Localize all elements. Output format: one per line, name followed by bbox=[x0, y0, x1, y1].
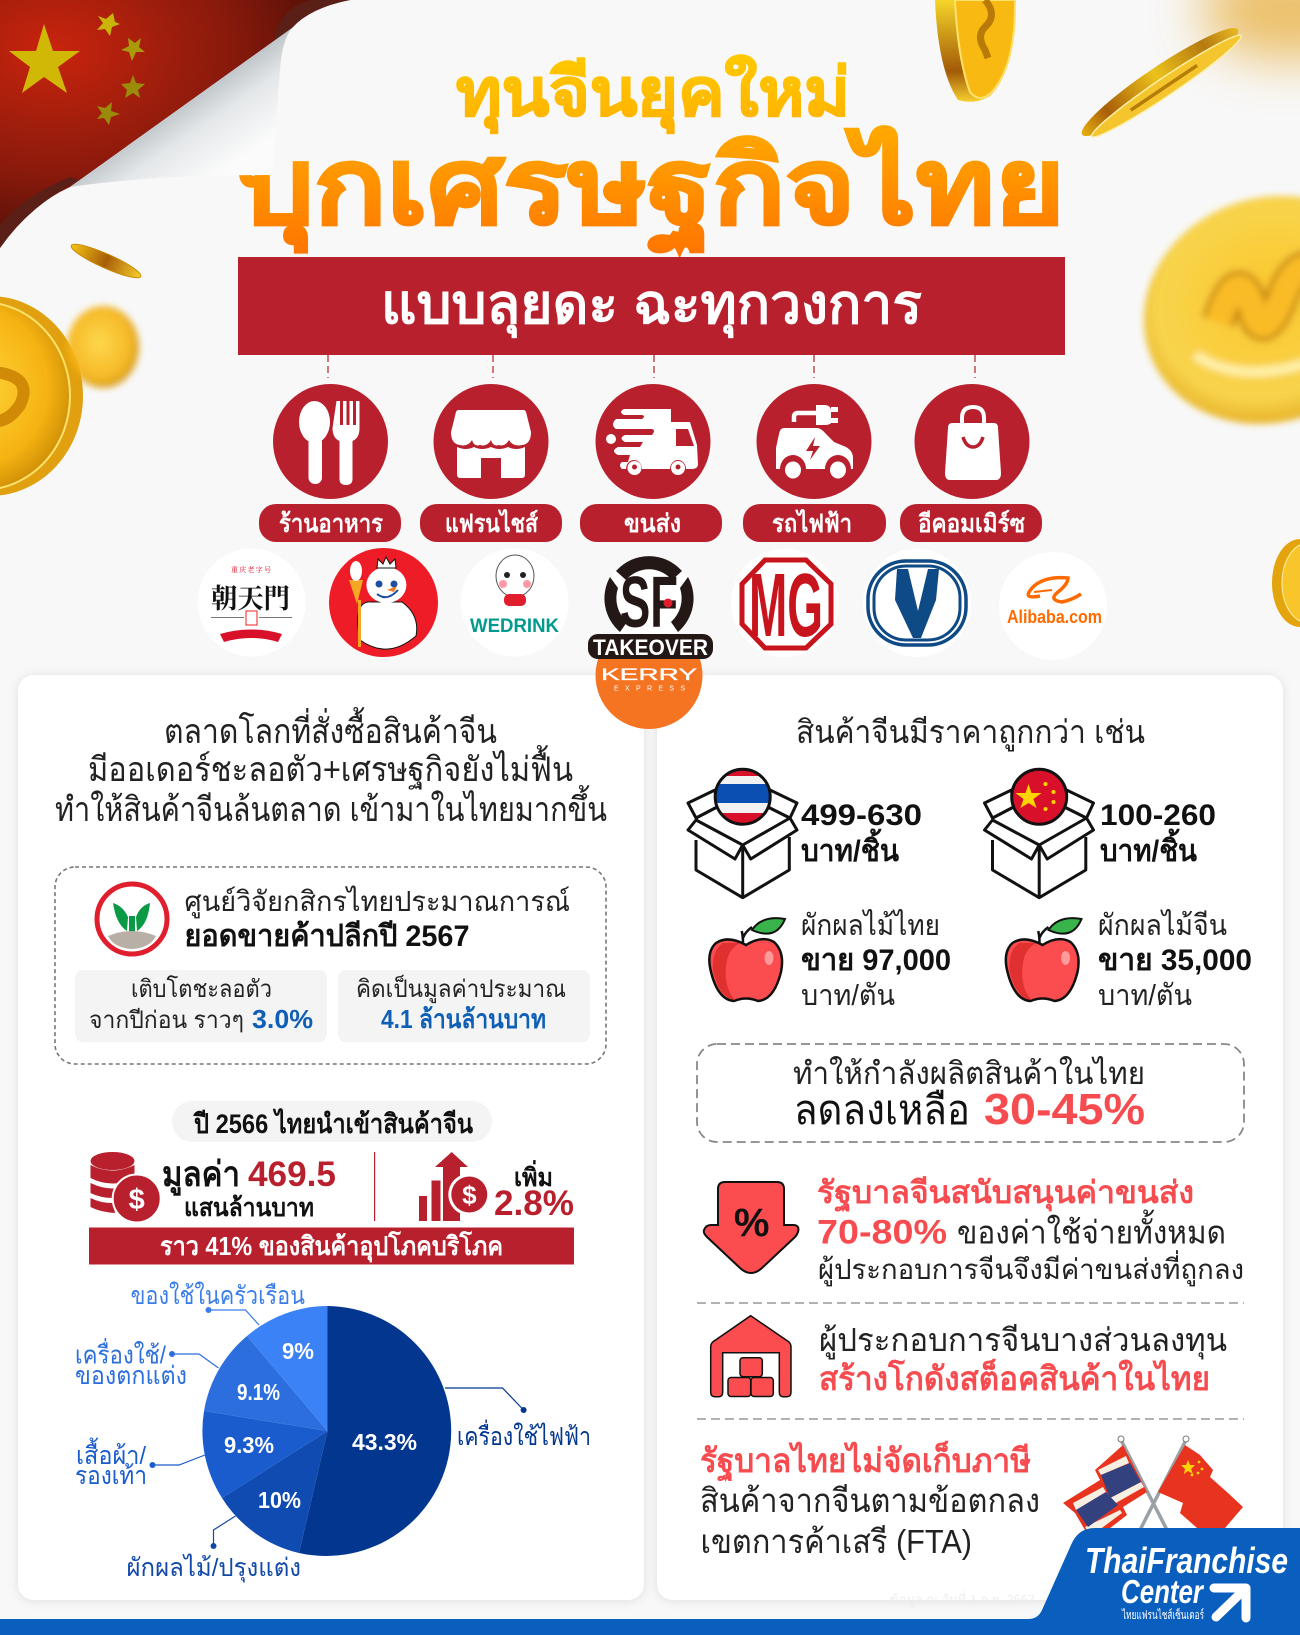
slice 9.1% bbox=[204, 1336, 328, 1431]
category: EV bbox=[743, 384, 886, 542]
footer brand: ThaiFranchise Center: ไทยแฟรนไชส์เซ็นเตอร์ bbox=[1121, 1607, 1204, 1622]
kerry circle bbox=[596, 659, 702, 729]
pie label: electronics: เครื่องใช้ไฟฟ้า bbox=[457, 1419, 591, 1451]
logo: Chao Tian Men: 重庆老字号 bbox=[231, 565, 271, 575]
label: logistics: ขนส่ง bbox=[624, 510, 681, 538]
text: shipping subsidy: ผู้ประกอบการจีนจึงมีค่าขนส่งที่ถูกลง bbox=[818, 1250, 1244, 1287]
flag corner with page curl bbox=[0, 0, 350, 248]
forecast heading: ศูนย์วิจัยกสิกรไทยประมาณการณ์ bbox=[184, 886, 570, 919]
text: warehouse: ผู้ประกอบการจีนบางส่วนลงทุน bbox=[819, 1322, 1227, 1360]
pie label: food: ผักผลไม้/ปรุงแต่ง bbox=[126, 1553, 301, 1583]
coin: right big blurred bbox=[1111, 161, 1300, 459]
text: FTA bbox=[700, 1440, 1040, 1560]
coin: left blurred small bbox=[67, 306, 139, 388]
logo: SF takeover Kerry: SF bbox=[620, 563, 678, 643]
stat: growth: จากปีก่อน ราวๆ bbox=[89, 1007, 244, 1034]
pie label: decor: เครื่องใช้/ bbox=[75, 1338, 166, 1370]
icon: kasikorn logo bbox=[97, 884, 167, 954]
category: restaurant bbox=[259, 384, 401, 542]
kerry circle: KERRY bbox=[601, 665, 697, 684]
text: shipping subsidy: 70-80% bbox=[817, 1214, 947, 1252]
logo: MG bbox=[731, 549, 839, 657]
label: EV bbox=[743, 504, 886, 542]
label: franchise: แฟรนไชส์ bbox=[445, 508, 539, 538]
icon: down arrow percent bbox=[704, 1182, 798, 1273]
text: FTA: สินค้าจากจีนตามข้อตกลง bbox=[700, 1482, 1040, 1519]
icon: growth bars with arrow bbox=[419, 1152, 490, 1221]
pie label: food bbox=[126, 1516, 301, 1583]
category: logistics bbox=[580, 384, 722, 542]
logo: Mixue bbox=[329, 548, 438, 657]
stat: value: คิดเป็นมูลค่าประมาณ bbox=[356, 974, 566, 1004]
left panel heading: มีออเดอร์ชะลอตัว+เศรษฐกิจยังไม่ฟื้น bbox=[88, 745, 573, 790]
left panel heading bbox=[55, 707, 607, 829]
callout: capacity: ทำให้กำลังผลิตสินค้าในไทย bbox=[793, 1056, 1145, 1091]
import growth bbox=[494, 1160, 574, 1223]
text: warehouse bbox=[819, 1322, 1227, 1397]
coin: top-right edge-on bbox=[1074, 17, 1247, 148]
produce price: China: บาท/ตัน bbox=[1098, 980, 1192, 1012]
icon: coin stack: $ bbox=[129, 1184, 145, 1216]
import heading pill: ปี 2566 ไทยนำเข้าสินค้าจีน bbox=[193, 1108, 473, 1139]
panel: left bbox=[18, 675, 644, 1600]
produce price: China: ผักผลไม้จีน bbox=[1098, 908, 1227, 942]
produce price: Thai bbox=[801, 908, 951, 1012]
logo: SF takeover Kerry: TAKEOVER bbox=[593, 635, 708, 660]
label: restaurant: ร้านอาหาร bbox=[279, 510, 383, 538]
callout: capacity: ลดลงเหลือ bbox=[794, 1087, 970, 1133]
category: e-commerce bbox=[900, 384, 1042, 542]
price: Chinese goods: 100-260 bbox=[1100, 799, 1216, 832]
logo: Chao Tian Men: 朝天門 bbox=[211, 577, 290, 616]
icon: apple Thai bbox=[709, 918, 785, 1001]
icon: box with China flag bbox=[984, 769, 1094, 898]
pie label: electronics bbox=[445, 1388, 591, 1451]
pie label: household bbox=[131, 1281, 305, 1325]
title bbox=[238, 53, 1065, 256]
produce price: Thai: ผักผลไม้ไทย bbox=[801, 908, 940, 942]
pie label: decor bbox=[75, 1338, 218, 1390]
text: FTA: รัฐบาลไทยไม่จัดเก็บภาษี bbox=[700, 1440, 1031, 1482]
title line 2: บุกเศรษฐกิจไทย bbox=[238, 126, 1065, 256]
logo: Wedrink bbox=[460, 548, 568, 656]
logo: Wedrink: WEDRINK bbox=[470, 616, 559, 637]
kerry circle: EXPRESS bbox=[614, 686, 685, 692]
flag stars bbox=[9, 13, 145, 125]
slice 9% bbox=[247, 1306, 328, 1431]
produce price: China: ขาย 35,000 bbox=[1098, 944, 1252, 977]
icon: brand arrow bbox=[1214, 1588, 1246, 1618]
pie label: decor: ของตกแต่ง bbox=[75, 1362, 187, 1390]
price: Chinese goods bbox=[1100, 799, 1216, 868]
icon: delivery truck bbox=[606, 409, 698, 475]
pie label: apparel bbox=[75, 1437, 205, 1490]
stat: value: 4.1 ล้านล้านบาท bbox=[381, 1004, 546, 1034]
icon: down arrow percent: % bbox=[734, 1201, 769, 1245]
pie label: apparel: เสื้อผ้า/ bbox=[76, 1437, 146, 1470]
right panel heading: สินค้าจีนมีราคาถูกกว่า เช่น bbox=[796, 714, 1145, 752]
icon: shopping bag bbox=[945, 407, 1001, 480]
stat: value bbox=[338, 970, 590, 1042]
import value: 469.5 bbox=[248, 1155, 336, 1194]
logo: Chao Tian Men bbox=[198, 548, 306, 656]
left panel heading: ตลาดโลกที่สั่งซื้อสินค้าจีน bbox=[164, 707, 497, 751]
stat: growth bbox=[75, 970, 327, 1042]
Thai flag bbox=[1063, 1445, 1147, 1542]
produce price: China bbox=[1098, 908, 1252, 1012]
retail forecast box: ยอดขายค้าปลีกปี 2567 bbox=[184, 920, 470, 953]
import value: มูลค่า bbox=[162, 1155, 240, 1196]
pie chart: 9.1% bbox=[237, 1379, 280, 1405]
pie chart: 43.3% bbox=[352, 1429, 417, 1455]
text: ข้อมูล ณ วันที่ 1 ก.ย. 2567 bbox=[890, 1591, 1035, 1608]
pie label: household: ของใช้ในครัวเรือน bbox=[131, 1281, 305, 1310]
label: EV: รถไฟฟ้า bbox=[772, 508, 852, 538]
produce price: Thai: ขาย 97,000 bbox=[801, 944, 951, 977]
text: shipping subsidy bbox=[817, 1175, 1244, 1287]
logo: MG: MG bbox=[749, 555, 823, 656]
icon: coin stack bbox=[90, 1152, 161, 1222]
panel: right bbox=[657, 675, 1283, 1600]
icon: electric car bbox=[776, 405, 853, 478]
title line 1: ทุนจีนยุคใหม่ bbox=[456, 53, 850, 134]
label: logistics bbox=[580, 504, 722, 542]
import heading pill bbox=[172, 1101, 492, 1142]
price: Thai goods bbox=[801, 799, 922, 868]
callout: capacity bbox=[697, 1044, 1244, 1142]
icon: crossed flags bbox=[1063, 1436, 1243, 1542]
import value: แสนล้านบาท bbox=[184, 1194, 314, 1222]
import growth: 2.8% bbox=[494, 1184, 574, 1223]
consumer goods band: ราว 41% ของสินค้าอุปโภคบริโภค bbox=[160, 1230, 503, 1263]
slice 9.3% bbox=[202, 1411, 328, 1498]
price: Chinese goods: บาท/ชิ้น bbox=[1100, 828, 1197, 868]
slice 43.3% bbox=[299, 1306, 451, 1556]
icon: box with Thai flag bbox=[688, 769, 797, 898]
text: shipping subsidy: รัฐบาลจีนสนับสนุนค่าขนส่ง bbox=[817, 1175, 1194, 1213]
pie chart: 9.3% bbox=[224, 1432, 274, 1458]
logo: Alibaba bbox=[999, 552, 1107, 660]
footer brand: ThaiFranchise Center bbox=[0, 1528, 1300, 1635]
icon: spoon and fork bbox=[299, 401, 360, 485]
left panel heading: ทำให้สินค้าจีนล้นตลาด เข้ามาในไทยมากขึ้น bbox=[55, 785, 607, 829]
coin: left large bbox=[0, 296, 83, 496]
price: Thai goods: บาท/ชิ้น bbox=[801, 828, 899, 868]
text: shipping subsidy: ของค่าใช้จ่ายทั้งหมด bbox=[957, 1210, 1226, 1250]
icon: warehouse bbox=[711, 1316, 791, 1397]
banner bbox=[238, 257, 1065, 355]
import value bbox=[162, 1155, 336, 1222]
label: e-commerce bbox=[900, 504, 1042, 542]
icon: store bbox=[451, 410, 531, 478]
label: franchise bbox=[420, 504, 562, 542]
icon: growth bars with arrow: $ bbox=[462, 1180, 477, 1210]
China flag bbox=[1158, 1445, 1243, 1542]
text: FTA: เขตการค้าเสรี (FTA) bbox=[700, 1523, 972, 1560]
callout: capacity: 30-45% bbox=[984, 1085, 1145, 1134]
price: Thai goods: 499-630 bbox=[801, 799, 922, 832]
stat: growth: เติบโตชะลอตัว bbox=[131, 975, 272, 1003]
stat: growth: 3.0% bbox=[252, 1004, 313, 1034]
import growth: เพิ่ม bbox=[514, 1160, 553, 1192]
coin: right edge bbox=[1272, 539, 1300, 627]
coin: top center bbox=[935, 0, 1016, 102]
pie chart bbox=[202, 1306, 451, 1556]
label: e-commerce: อีคอมเมิร์ซ bbox=[918, 509, 1025, 538]
coin: top-right blurred glow bbox=[1200, 0, 1300, 60]
retail forecast box bbox=[55, 867, 606, 1064]
slice 10% bbox=[222, 1431, 328, 1553]
footer brand: ThaiFranchise Center: Center bbox=[1121, 1573, 1205, 1610]
label: restaurant bbox=[259, 504, 401, 542]
pie chart: 9% bbox=[282, 1338, 314, 1364]
pie label: apparel: รองเท้า bbox=[75, 1462, 147, 1490]
logo: Alibaba: Alibaba.com bbox=[1007, 607, 1102, 627]
consumer goods band bbox=[89, 1228, 574, 1264]
banner: แบบลุยดะ ฉะทุกวงการ bbox=[381, 273, 922, 339]
icon: apple China bbox=[1006, 918, 1082, 1001]
logo: SF takeover Kerry bbox=[588, 556, 713, 729]
produce price: Thai: บาท/ตัน bbox=[801, 980, 895, 1012]
logo: Changan bbox=[863, 549, 971, 657]
coin: small flat bbox=[68, 239, 144, 283]
category: franchise bbox=[420, 384, 562, 542]
pie chart: 10% bbox=[258, 1487, 301, 1513]
text: warehouse: สร้างโกดังสต็อคสินค้าในไทย bbox=[819, 1358, 1210, 1397]
